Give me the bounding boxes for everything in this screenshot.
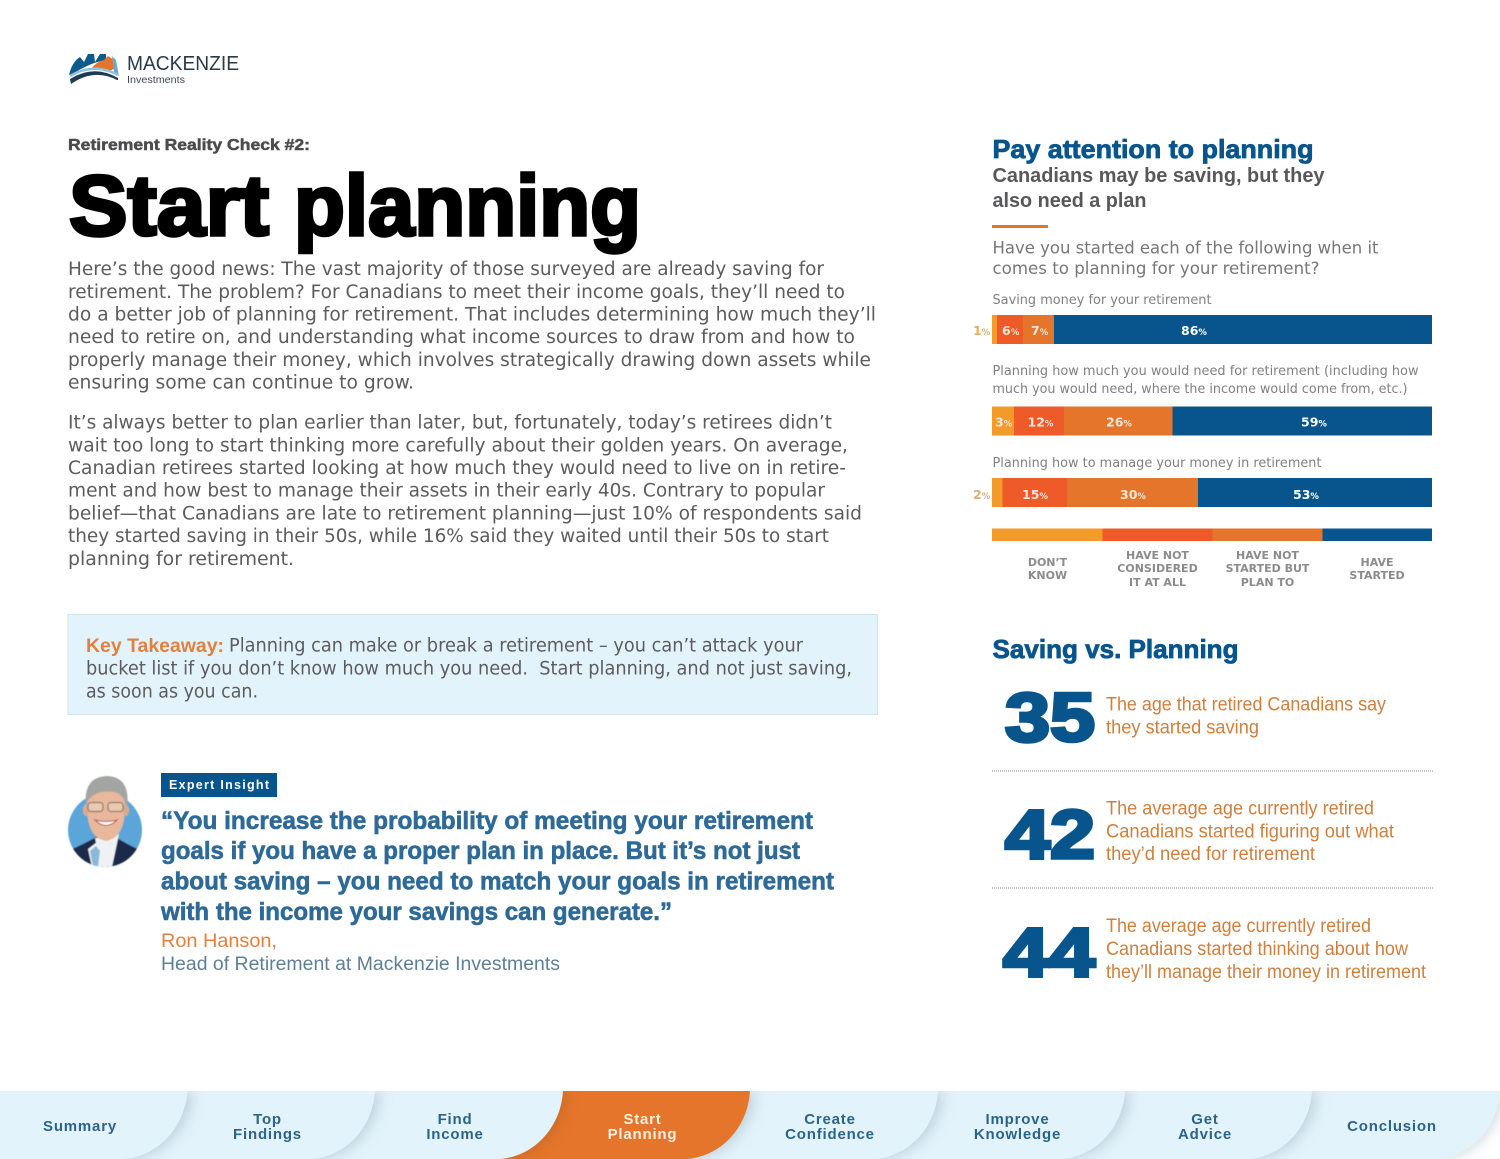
chart legend xyxy=(992,528,1432,589)
bar chart: planning how to manage xyxy=(973,455,1432,507)
title xyxy=(69,159,641,254)
body paragraph 2: they started saving in their 50s, while 16% said they waited until their 50s to start xyxy=(68,526,829,547)
stat: age 42: 42 xyxy=(1005,796,1095,873)
logo: Mackenzie Investments: MACKENZIE xyxy=(127,53,239,75)
quote attribution xyxy=(161,931,560,975)
logo: Mackenzie Investments: Investments xyxy=(127,75,185,86)
bar chart: planning how to manage: 53% xyxy=(1293,487,1319,502)
eyebrow heading: Retirement Reality Check #2: xyxy=(68,137,310,154)
navigation bar: Advice xyxy=(1178,1126,1232,1143)
expert quote: with the income your savings can generate.” xyxy=(160,898,672,926)
stat: age 44: Canadians started thinking about how xyxy=(1106,939,1408,960)
bar chart: saving money: 7% xyxy=(1031,323,1049,338)
heading: pay attention to planning xyxy=(992,134,1325,228)
navigation bar: Income xyxy=(426,1126,484,1143)
expert quote xyxy=(160,807,835,926)
bar chart: planning how much: 26% xyxy=(1106,414,1132,430)
stat: age 35: The age that retired Canadians say xyxy=(1106,694,1386,716)
bar chart: planning how much xyxy=(992,363,1432,436)
stat: age 44: The average age currently retired xyxy=(1106,916,1371,937)
badge: Expert Insight: Expert Insight xyxy=(169,778,270,792)
callout: key takeaway xyxy=(68,614,878,714)
expert quote: goals if you have a proper plan in place. But it’s not just xyxy=(161,837,801,865)
body paragraph 2: wait too long to start thinking more carefully about their golden years. On average, xyxy=(68,436,848,456)
navigation bar: Planning xyxy=(608,1126,677,1143)
stat: age 35: they started saving xyxy=(1106,718,1259,738)
bar chart: planning how much: much you would need, where the income would come from, etc.) xyxy=(992,381,1408,397)
active tab: start planning xyxy=(501,1091,750,1159)
body paragraph 2: belief—that Canadians are late to retirement planning—just 10% of respondents said xyxy=(68,504,862,524)
navigation bar: Findings xyxy=(233,1126,302,1143)
navigation bar: Confidence xyxy=(785,1126,875,1143)
stat: age 42: they’d need for retirement xyxy=(1106,844,1316,865)
title: Start xyxy=(69,159,269,254)
body paragraph 2: planning for retirement. xyxy=(68,549,294,570)
navigation bar: Conclusion xyxy=(1347,1118,1437,1135)
navigation bar: Start xyxy=(623,1111,662,1128)
bar chart: planning how to manage: 2% xyxy=(973,487,991,502)
chart legend: HAVE xyxy=(1360,556,1394,569)
callout: key takeaway: Planning can make or break a retirement – you can’t attack your xyxy=(229,636,803,656)
heading: pay attention to planning: Pay attention to planning xyxy=(992,134,1314,164)
callout: key takeaway: Key Takeaway: xyxy=(86,636,224,657)
stat: age 35 xyxy=(1005,679,1386,756)
expert portrait xyxy=(68,776,142,870)
survey question: Have you started each of the following when it xyxy=(992,238,1379,258)
chart legend: CONSIDERED xyxy=(1117,562,1198,575)
bar chart: planning how much: 3% xyxy=(995,414,1013,430)
stat: age 44: they’ll manage their money in retirement xyxy=(1106,962,1427,983)
body paragraph 1 xyxy=(68,259,876,394)
expert quote: “You increase the probability of meeting your retirement xyxy=(161,807,814,835)
chart legend: KNOW xyxy=(1028,569,1067,582)
chart legend: HAVE NOT xyxy=(1126,549,1189,562)
bar chart: saving money: 86% xyxy=(1181,323,1207,338)
stat: age 42 xyxy=(1005,796,1395,873)
callout: key takeaway: as soon as you can. xyxy=(86,682,258,702)
navigation bar: Find xyxy=(438,1111,472,1128)
body paragraph 1: Here’s the good news: The vast majority of those surveyed are already saving for xyxy=(68,259,824,280)
bar chart: planning how much: Planning how much you would need for retirement (including how xyxy=(992,363,1418,379)
bar chart: planning how to manage: 30% xyxy=(1120,487,1146,502)
heading: pay attention to planning: also need a plan xyxy=(992,190,1146,212)
expert quote: about saving – you need to match your goals in retirement xyxy=(161,868,835,896)
bar chart: planning how much: 59% xyxy=(1301,414,1327,430)
callout: key takeaway: bucket list if you don’t know how much you need. Start planning, and not just saving, xyxy=(86,658,852,680)
bar chart: planning how to manage: 15% xyxy=(1022,487,1048,502)
survey question: comes to planning for your retirement? xyxy=(992,259,1320,279)
heading: pay attention to planning: Canadians may be saving, but they xyxy=(992,165,1325,187)
stat: age 42: The average age currently retired xyxy=(1106,798,1374,820)
bar chart: planning how to manage: Planning how to manage your money in retirement xyxy=(992,455,1322,471)
body paragraph 2: It’s always better to plan earlier than later, but, fortunately, today’s retirees didn’t xyxy=(68,412,832,434)
navigation bar: Create xyxy=(804,1111,856,1128)
logo: Mackenzie Investments xyxy=(69,53,239,86)
survey question xyxy=(992,238,1379,279)
navigation bar: Top xyxy=(253,1111,282,1128)
bar chart: saving money: 6% xyxy=(1002,323,1020,338)
chart legend: IT AT ALL xyxy=(1129,576,1186,589)
bar chart: saving money: Saving money for your retirement xyxy=(992,292,1212,308)
title: planning xyxy=(294,159,641,254)
body paragraph 1: need to retire on, and understanding what income sources to draw from and how to xyxy=(68,327,855,348)
stat: age 44 xyxy=(1003,914,1427,991)
stat: age 35: 35 xyxy=(1005,679,1095,756)
body paragraph 1: ensuring some can continue to grow. xyxy=(68,372,414,394)
body paragraph 1: properly manage their money, which involves strategically drawing down assets while xyxy=(68,350,871,371)
navigation bar: Knowledge xyxy=(974,1126,1061,1143)
navigation bar: Improve xyxy=(986,1111,1049,1128)
quote attribution: Ron Hanson, xyxy=(161,931,277,952)
body paragraph 1: do a better job of planning for retirement. That includes determining how much they’ll xyxy=(68,304,876,326)
stat: age 42: Canadians started figuring out what xyxy=(1106,822,1395,842)
chart legend: PLAN TO xyxy=(1241,576,1294,589)
bar chart: saving money xyxy=(973,292,1432,344)
chart legend: DON’T xyxy=(1028,556,1068,569)
navigation bar xyxy=(0,1091,1500,1159)
chart legend: STARTED xyxy=(1349,569,1405,582)
quote attribution: Head of Retirement at Mackenzie Investments xyxy=(161,954,560,975)
chart legend: STARTED BUT xyxy=(1226,562,1310,575)
heading: saving vs planning: Saving vs. Planning xyxy=(992,634,1238,664)
chart legend: HAVE NOT xyxy=(1236,549,1299,562)
body paragraph 2: ment and how best to manage their assets in their early 40s. Contrary to popular xyxy=(68,480,825,502)
bar chart: planning how much: 12% xyxy=(1028,414,1054,430)
bar chart: saving money: 1% xyxy=(973,323,991,338)
body paragraph 2: Canadian retirees started looking at how much they would need to live on in retire- xyxy=(68,458,846,479)
navigation bar: Get xyxy=(1191,1111,1219,1128)
badge: Expert Insight xyxy=(161,773,277,797)
navigation bar: Summary xyxy=(43,1118,117,1135)
body paragraph 1: retirement. The problem? For Canadians to meet their income goals, they’ll need to xyxy=(68,282,845,303)
body paragraph 2 xyxy=(68,412,862,570)
stat: age 44: 44 xyxy=(1003,914,1095,991)
